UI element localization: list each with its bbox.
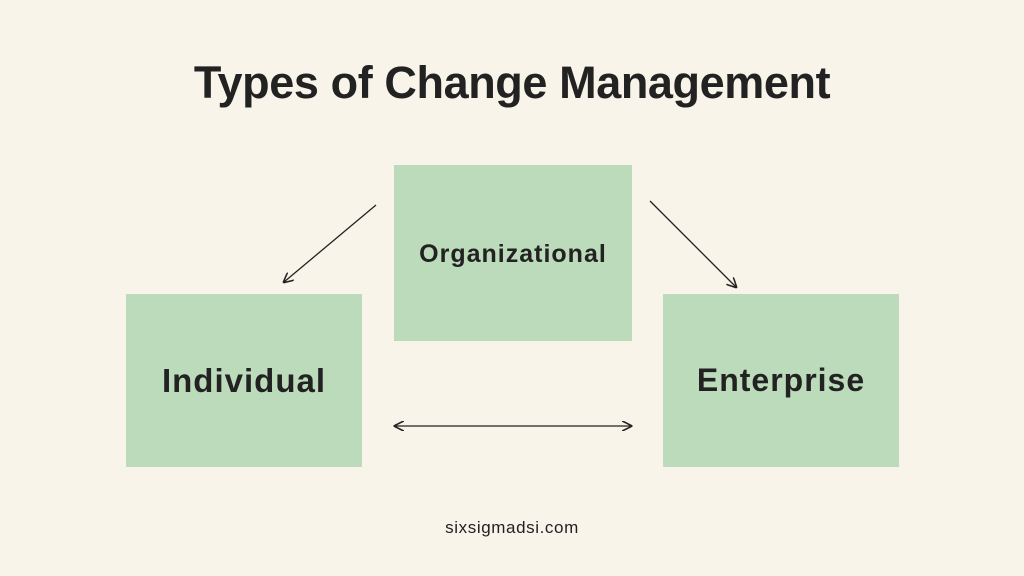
box: organizational [394,165,632,341]
box: organizational: Organizational [419,240,607,268]
footer: sixsigmadsi.com [445,518,579,537]
box: individual [126,294,362,467]
title: Types of Change Management [194,57,830,108]
box: individual: Individual [162,362,326,398]
box: enterprise: Enterprise [697,362,865,398]
arrow: organizational to enterprise [650,201,736,287]
box: enterprise [663,294,899,467]
arrow: individual to enterprise [395,425,631,427]
arrow: organizational to individual [284,205,376,282]
